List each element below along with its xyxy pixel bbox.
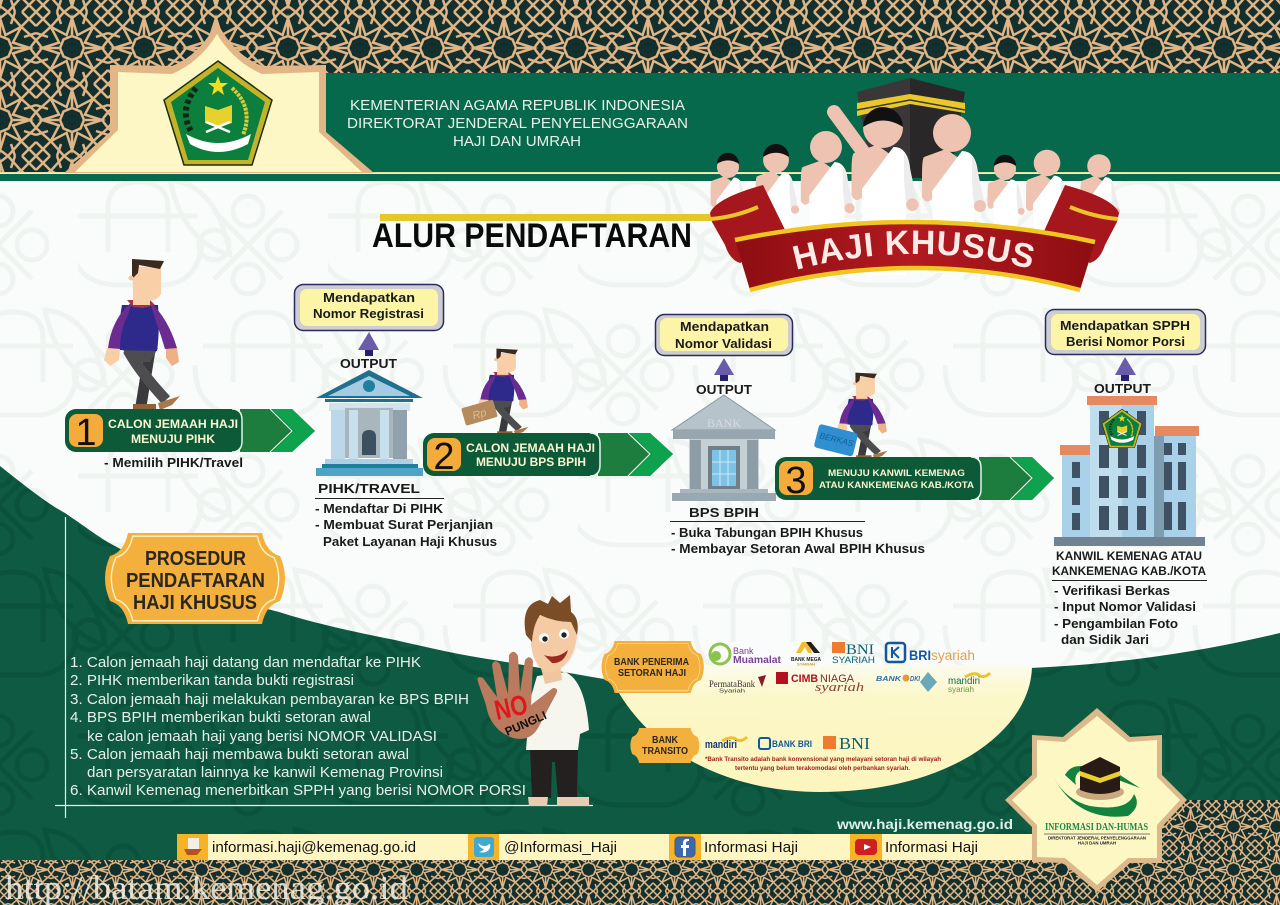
logo: mandiri syariah: mandiri [948, 676, 980, 687]
BPS BPIH label and list [670, 505, 925, 556]
contact bar [177, 834, 1037, 860]
kaaba [857, 78, 965, 178]
output box 1 [294, 284, 444, 330]
bank transito badge [630, 728, 699, 763]
procedure steps list: 3. Calon jemaah haji melakukan pembayaran ke BPS BPIH [70, 691, 469, 708]
bank icon: BPS BPIH: BANK [707, 416, 741, 430]
bank icon: PIHK [316, 370, 423, 476]
office building icon [1054, 396, 1205, 546]
pungli text: PUNGLI [503, 708, 549, 739]
PIHK label and list: PIHK/TRAVEL [318, 481, 420, 496]
header band [0, 0, 1280, 181]
kanwil label and list: KANWIL KEMENAG ATAU [1056, 549, 1202, 563]
website: www.haji.kemenag.go.id [836, 816, 1013, 832]
kanwil label and list: - Input Nomor Validasi [1054, 599, 1196, 614]
no text: NO [492, 689, 530, 726]
informasi dan humas star logo: HAJI DAN UMRAH [1078, 840, 1116, 846]
logo: bni [823, 734, 870, 753]
logo: bank dki: DKI [910, 676, 921, 683]
step 2 arrow: CALON JEMAAH HAJI [466, 443, 595, 455]
kanwil label and list: KANKEMENAG KAB./KOTA [1052, 564, 1206, 578]
procedure steps list: 1. Calon jemaah haji datang dan mendaftar ke PIHK [70, 654, 421, 671]
step 1 arrow: MENUJU PIHK [131, 434, 216, 446]
step 2 arrow [423, 433, 673, 478]
output label 3: OUTPUT [1094, 381, 1151, 396]
header text: KEMENTERIAN AGAMA REPUBLIK INDONESIA [350, 98, 685, 114]
youtube text: Informasi Haji [885, 840, 978, 856]
logo: bri syariah: BRI [909, 647, 931, 663]
PIHK label and list: - Mendaftar Di PIHK [315, 501, 444, 516]
step 2 walking man with Rp case: Rp [471, 407, 488, 422]
step 2 walking man with Rp case [461, 349, 529, 435]
procedure steps list: 2. PIHK memberikan tanda bukti registrasi [70, 672, 354, 689]
transito footnote: tertentu yang belum terakomodasi oleh perbankan syariah. [735, 765, 910, 772]
transito footnote [705, 756, 941, 772]
facebook text: Informasi Haji [704, 840, 798, 856]
output box 1: Nomor Registrasi [313, 306, 424, 321]
logo: bank dki: BANK [876, 676, 902, 683]
bank transito badge: BANK [652, 735, 679, 746]
logo: cimb niaga [776, 672, 864, 694]
output box 3: Berisi Nomor Porsi [1066, 334, 1185, 349]
output box 3: Mendapatkan SPPH [1060, 318, 1190, 333]
prosedur badge [105, 533, 285, 624]
bank penerima badge: BANK PENERIMA [614, 657, 689, 668]
ribbon: haji khusus [710, 185, 1119, 292]
kanwil label and list: dan Sidik Jari [1061, 632, 1149, 647]
PIHK label and list: Paket Layanan Haji Khusus [323, 534, 497, 549]
icon: email [177, 834, 208, 860]
bank logos [705, 642, 990, 753]
output arrow 3 [1115, 357, 1136, 381]
step 3 walking man with berkas case [814, 373, 888, 459]
building emblem [1102, 409, 1142, 448]
procedure steps list: 6. Kanwil Kemenag menerbitkan SPPH yang berisi NOMOR PORSI [70, 782, 526, 799]
step 1 arrow [65, 409, 315, 454]
procedure frame lines [55, 517, 593, 818]
logo: bank bri [759, 738, 812, 749]
informasi dan humas star logo: DIREKTORAT JENDERAL PENYELENGGARAAN [1048, 836, 1146, 840]
logo: bri syariah: syariah [931, 647, 975, 663]
procedure steps list: 5. Calon jemaah haji membawa bukti setoran awal [70, 746, 409, 763]
prosedur badge: PROSEDUR [145, 548, 246, 570]
logo: cimb niaga: NIAGA [820, 673, 855, 685]
output box 1: Mendapatkan [323, 290, 415, 305]
output label 1: OUTPUT [340, 356, 397, 371]
humas text: INFORMASI DAN-HUMAS [1045, 821, 1148, 833]
output label 2: OUTPUT [696, 382, 752, 397]
procedure steps list: ke calon jemaah haji yang berisi NOMOR VALIDASI [87, 728, 437, 745]
logo: bri syariah [886, 643, 975, 663]
logo: bni syariah [832, 642, 875, 665]
bank penerima badge [602, 641, 704, 693]
step 1 note: - Memilih PIHK/Travel [104, 455, 243, 470]
logo: bank dki [876, 672, 937, 692]
procedure steps list: dan persyaratan lainnya ke kanwil Kemenag Provinsi [87, 764, 443, 781]
bank penerima badge: SETORAN HAJI [618, 668, 686, 679]
output box 2: Mendapatkan [680, 319, 769, 334]
informasi dan humas star logo [1005, 708, 1187, 892]
email text: informasi.haji@kemenag.go.id [212, 840, 416, 856]
step 3 arrow: MENUJU KANWIL KEMENAG [828, 468, 965, 479]
procedure steps list [70, 654, 526, 799]
kanwil label and list: - Verifikasi Berkas [1054, 583, 1170, 598]
step 1 walking man [104, 259, 180, 410]
emblem [164, 61, 272, 165]
step 3 walking man with berkas case: BERKAS [819, 430, 855, 448]
step 2 arrow: 2 [433, 436, 455, 478]
logo: bni: BNI [839, 734, 870, 753]
logo: bank mega: BANK MEGA [791, 657, 821, 663]
transito footnote: *Bank Transito adalah bank konvensional yang melayani setoran haji di wilayah [705, 756, 941, 763]
no pungli character [478, 595, 589, 806]
pilgrims [711, 107, 1120, 275]
logo: cimb niaga: syariah [815, 679, 864, 694]
kanwil label and list [1052, 549, 1207, 647]
twitter text: @Informasi_Haji [504, 840, 617, 856]
logo: mandiri syariah: syariah [948, 684, 974, 694]
logo: mandiri syariah [948, 673, 990, 694]
logo: permata bank: PermataBank [709, 679, 755, 689]
BPS BPIH label and list: - Buka Tabungan BPIH Khusus [671, 525, 863, 540]
logo: permata bank [709, 675, 766, 694]
step 3 arrow: ATAU KANKEMENAG KAB./KOTA [819, 480, 974, 491]
header text [347, 98, 688, 150]
prosedur badge: PENDAFTARAN [126, 570, 265, 592]
step 3 arrow [775, 457, 1054, 502]
logo star frame [64, 22, 374, 173]
logo: bank muamalat: Bank [733, 646, 754, 656]
title: ALUR PENDAFTARAN [372, 217, 692, 255]
icon: facebook [669, 834, 701, 860]
PIHK label and list [315, 481, 497, 549]
logo: bank mega [791, 642, 821, 666]
green wave lower background [0, 466, 1280, 905]
logo: bni syariah: SYARIAH [832, 655, 875, 665]
ribbon text: HAJI KHUSUS [792, 230, 1034, 270]
step 1 arrow: CALON JEMAAH HAJI [108, 419, 238, 431]
procedure steps list: 4. BPS BPIH memberikan bukti setoran awal [70, 709, 371, 726]
logo: bank muamalat [710, 644, 782, 666]
prosedur badge: HAJI KHUSUS [133, 592, 257, 614]
logo: bank mega: SYARIAH [797, 662, 815, 666]
icon: twitter [468, 834, 499, 860]
output box 3 [1046, 310, 1206, 354]
bank transito badge: TRANSITO [642, 746, 688, 757]
BPS BPIH label and list: BPS BPIH [689, 505, 759, 520]
kanwil label and list: - Pengambilan Foto [1054, 616, 1178, 631]
output box 2: Nomor Validasi [675, 336, 772, 351]
header text: DIREKTORAT JENDERAL PENYELENGGARAAN [347, 116, 688, 132]
step 3 arrow: 3 [785, 460, 807, 502]
output arrow 2 [714, 358, 734, 381]
bank icon: BPS BPIH [672, 395, 776, 501]
step 1 arrow: 1 [75, 412, 97, 454]
logo: bni syariah: BNI [846, 642, 874, 658]
swoosh and kaaba [1054, 757, 1140, 817]
PIHK label and list: - Membuat Surat Perjanjian [315, 517, 493, 532]
logo: mandiri: mandiri [705, 739, 737, 751]
output box 2 [656, 314, 792, 356]
logo: bank muamalat: Muamalat [733, 655, 782, 666]
logo: cimb niaga: CIMB [791, 673, 818, 685]
logo: permata bank: Syariah [719, 688, 745, 694]
bank panel cream [606, 665, 1032, 792]
step 2 arrow: MENUJU BPS BPIH [476, 457, 586, 469]
header text: HAJI DAN UMRAH [453, 134, 581, 150]
logo: bank bri: BANK BRI [772, 739, 812, 749]
output arrow 1 [358, 332, 379, 356]
bottom ornament band [0, 800, 1280, 905]
BPS BPIH label and list: - Membayar Setoran Awal BPIH Khusus [671, 541, 925, 556]
icon: youtube [850, 834, 882, 860]
